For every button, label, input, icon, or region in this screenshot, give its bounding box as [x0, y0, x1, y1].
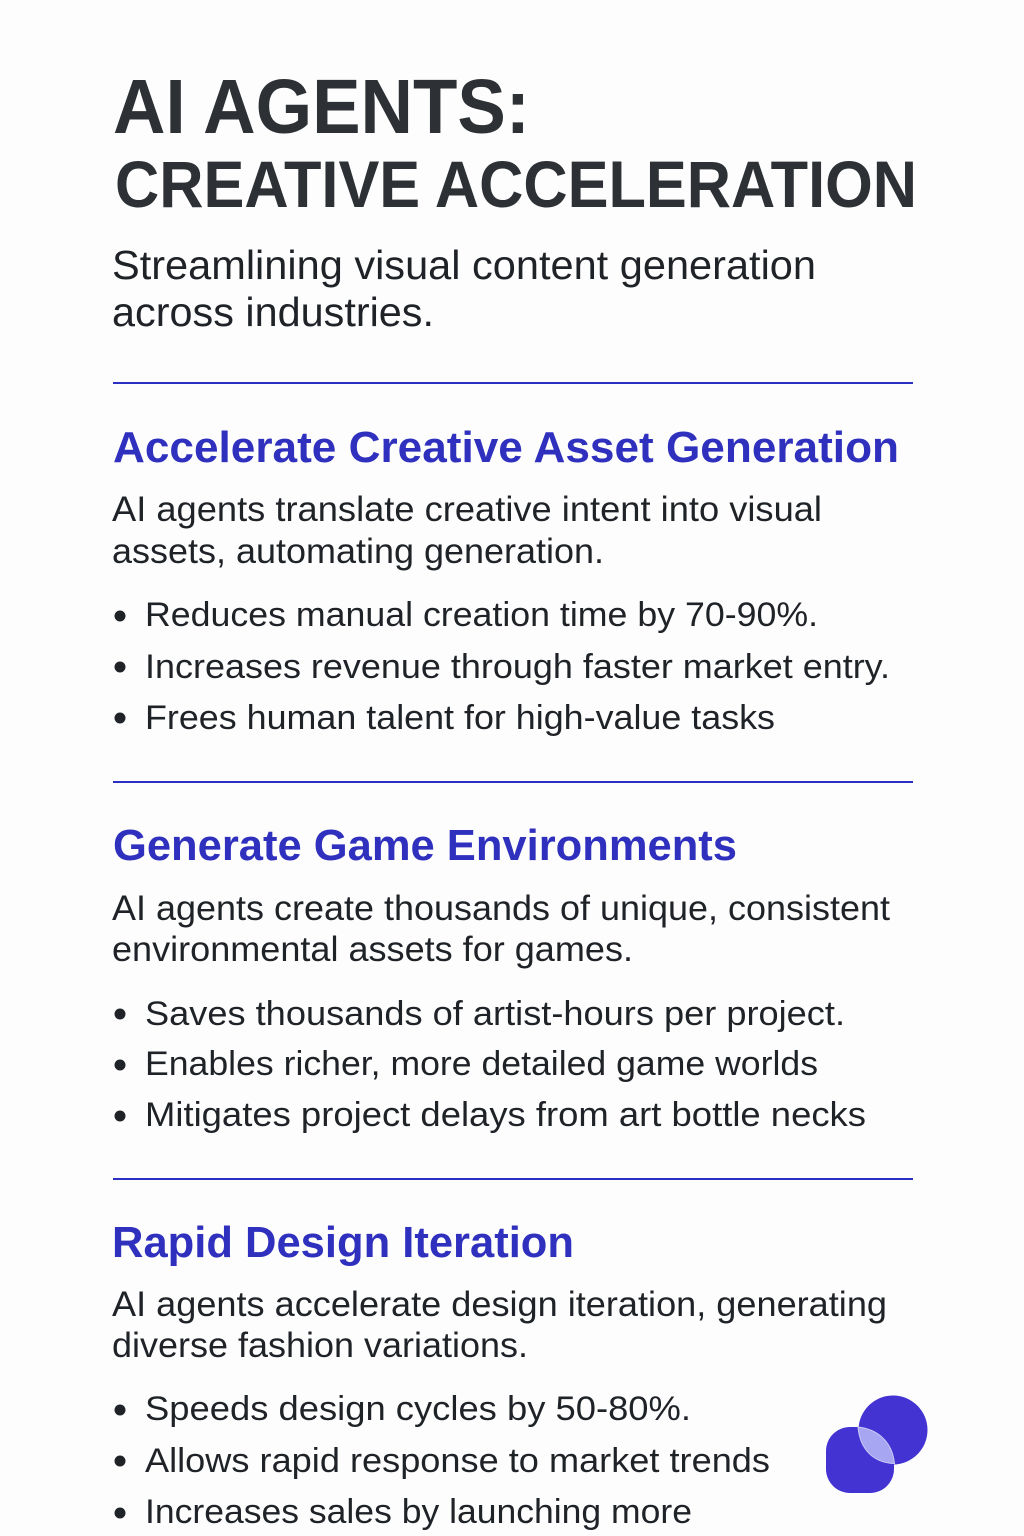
panel: rapid design iteration [112, 1218, 887, 1531]
subtitle: across industries. [112, 289, 434, 335]
bullet list [114, 995, 866, 1134]
bullet list: Saves thousands of artist-hours per project. [145, 995, 845, 1033]
bullet list: Increases revenue through faster market entry. [145, 648, 890, 686]
bullet list: Frees human talent for high-value tasks [145, 699, 775, 737]
bullet list [114, 596, 890, 737]
description [112, 489, 822, 571]
title: CREATIVE ACCELERATION [115, 147, 917, 221]
description: AI agents translate creative intent into visual [112, 489, 822, 529]
bullet list: Reduces manual creation time by 70-90%. [145, 596, 818, 634]
panel: accelerate creative asset generation [112, 423, 899, 737]
description: diverse fashion variations. [112, 1325, 528, 1365]
bullet list: Enables richer, more detailed game worlds [145, 1045, 818, 1083]
bullet list: Speeds design cycles by 50-80%. [145, 1390, 691, 1428]
title [113, 64, 917, 221]
bullet list: Increases sales by launching more [145, 1493, 692, 1531]
description: environmental assets for games. [112, 929, 633, 969]
description: AI agents create thousands of unique, consistent [112, 888, 890, 928]
title: AI AGENTS: [113, 64, 530, 150]
description: AI agents accelerate design iteration, generating [112, 1284, 887, 1324]
description [112, 1284, 887, 1365]
subtitle: Streamlining visual content generation [112, 242, 816, 288]
description: assets, automating generation. [112, 531, 604, 571]
panel: generate game environments [112, 821, 890, 1134]
description [112, 888, 890, 969]
bullet list: Mitigates project delays from art bottle necks [145, 1096, 866, 1134]
heading: Rapid Design Iteration [112, 1218, 574, 1267]
header [112, 64, 917, 335]
subtitle [112, 242, 816, 335]
bullet list [114, 1390, 770, 1531]
heading: Generate Game Environments [113, 821, 737, 870]
bullet list: Allows rapid response to market trends [145, 1442, 770, 1480]
heading: Accelerate Creative Asset Generation [113, 423, 899, 472]
icon: overlapping logo shapes [826, 1396, 928, 1493]
